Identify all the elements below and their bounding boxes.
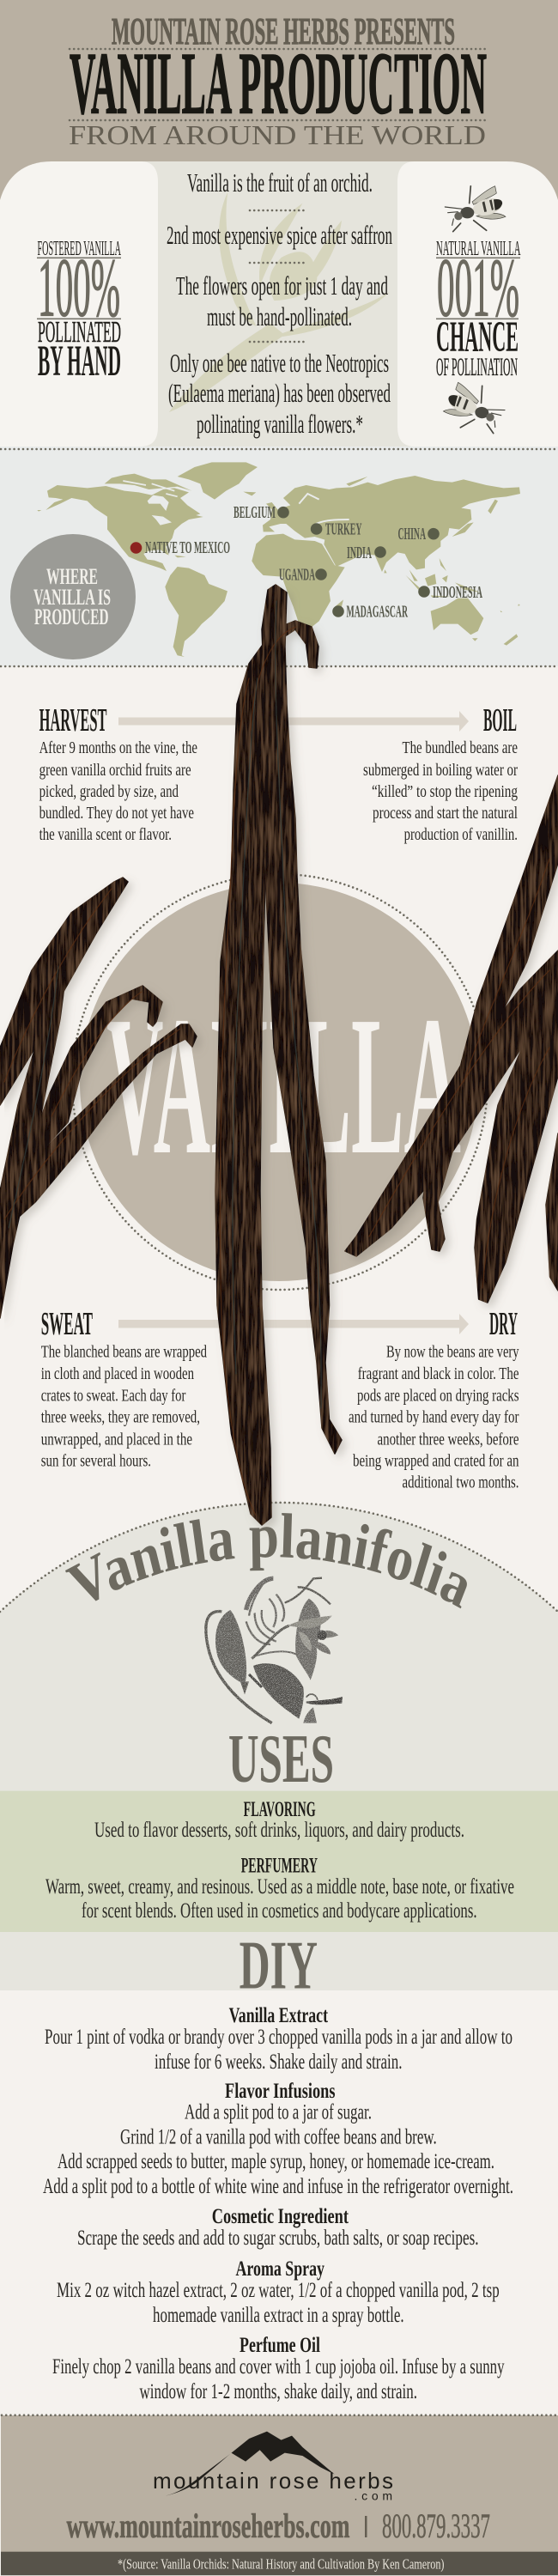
where vanilla is produced badge <box>10 534 136 659</box>
header banner <box>0 0 558 206</box>
text: sweat <box>41 1343 207 1470</box>
text: sweat: in cloth and placed in wooden <box>41 1364 194 1383</box>
text: harvest: After 9 months on the vine, the <box>39 738 197 757</box>
arrow: harvest to boil <box>118 711 469 732</box>
icon: top bee <box>445 186 506 232</box>
text: dry <box>349 1343 519 1492</box>
text: boil: production of vanillin. <box>404 825 518 844</box>
bean: left long diagonal <box>0 1024 197 1234</box>
marker: Uganda: UGANDA <box>279 566 315 585</box>
where vanilla is produced badge: VANILLA IS <box>33 585 111 610</box>
panel: diy recipes: infuse for 6 weeks. Shake daily and strain. <box>155 2050 402 2074</box>
panel: map: NATIVE TO MEXICO <box>145 538 230 557</box>
panel: fostered vanilla stat: 100% <box>38 242 120 335</box>
text: boil <box>363 738 518 844</box>
where vanilla is produced badge: PRODUCED <box>34 605 108 629</box>
panel: diy recipes: Cosmetic Ingredient <box>212 2205 349 2228</box>
title: subtitle: FROM AROUND THE WORLD <box>69 119 486 150</box>
heading: vanilla planifolia curved: Vanilla planifolia <box>65 1513 467 1609</box>
panel: diy recipes: Aroma Spray <box>235 2257 324 2281</box>
fact: bee: pollinating vanilla flowers.* <box>197 409 363 439</box>
text: sweat: sun for several hours. <box>41 1451 151 1470</box>
text: harvest <box>39 738 197 844</box>
marker: Indonesia: INDONESIA <box>433 583 482 602</box>
panel: fostered vanilla stat: FOSTERED VANILLA <box>38 238 121 260</box>
world map: Eurasia, Africa, Australia <box>252 476 520 646</box>
fact: orchid: Vanilla is the fruit of an orchid. <box>187 167 373 197</box>
marker: Uganda <box>279 566 327 585</box>
text: sweat: unwrapped, and placed in the <box>41 1430 192 1449</box>
vanilla beans <box>0 585 558 1525</box>
arrow: sweat to dry <box>118 1314 469 1334</box>
panel: diy recipes: Flavor Infusions <box>225 2080 336 2103</box>
panel: map: MADAGASCAR <box>347 603 408 622</box>
panel: natural vanilla stat <box>397 161 558 447</box>
bean: right diagonal <box>345 951 558 1256</box>
fact: bee <box>168 348 391 439</box>
text: harvest: green vanilla orchid fruits are <box>39 761 191 780</box>
text: sweat: three weeks, they are removed, <box>41 1408 200 1427</box>
bean: right lower <box>475 1024 558 1303</box>
panel: uses <box>0 1791 558 1932</box>
marker: Indonesia <box>418 583 482 602</box>
panel: diy recipes: Vanilla Extract <box>229 2004 328 2027</box>
bean: right tail <box>423 775 558 1251</box>
text: dry: additional two months. <box>402 1473 519 1492</box>
panel: diy recipes <box>43 2004 513 2403</box>
text: sweat: crates to sweat. Each day for <box>41 1387 186 1406</box>
marker: India: INDIA <box>347 544 372 562</box>
marker: Belgium <box>234 503 289 522</box>
panel: fostered vanilla stat: BY HAND <box>38 337 121 386</box>
marker: Madagascar <box>332 603 408 622</box>
panel: uses: PERFUMERY <box>241 1855 318 1878</box>
bean: left upper <box>0 878 128 1105</box>
text: DRY <box>489 1306 518 1342</box>
vanilla circle emblem <box>72 874 488 1290</box>
text: SWEAT <box>41 1306 93 1342</box>
text: harvest: the vanilla scent or flavor. <box>39 825 172 844</box>
marker: Belgium: BELGIUM <box>234 503 276 522</box>
panel: diy recipes: window for 1-2 months, shake daily, and strain. <box>139 2380 417 2403</box>
bean streak highlights <box>4 601 549 1516</box>
where vanilla is produced badge: WHERE <box>46 564 98 589</box>
heading: uses: USES <box>228 1722 334 1797</box>
marker: China: CHINA <box>398 525 426 544</box>
marker: Turkey <box>311 520 362 539</box>
panel: diy recipes: Add a split pod to a jar of sugar. <box>185 2101 372 2124</box>
panel: fostered vanilla stat <box>0 161 158 447</box>
text: HARVEST <box>39 702 106 738</box>
logo: mountain rose herbs: .com <box>354 2489 392 2503</box>
bean: right edge <box>546 1133 558 1291</box>
bean: left hook <box>32 986 162 1162</box>
bean: center left with hook <box>215 621 318 1525</box>
heading: diy: DIY <box>240 1929 318 2004</box>
source bar <box>1 2552 558 2575</box>
website: www.mountainroseherbs.com <box>67 2506 350 2545</box>
panel: map <box>0 447 558 666</box>
panel: vanilla planifolia dome <box>0 1501 558 2004</box>
fact: flowers: must be hand-pollinated. <box>207 301 352 331</box>
illustration: faded orchid <box>169 191 390 412</box>
bean: left curved stem <box>0 956 66 1318</box>
icon: bottom bee <box>441 381 507 434</box>
fact: flowers: The flowers open for just 1 day and <box>176 270 388 301</box>
panel: uses: FLAVORING <box>244 1798 316 1821</box>
world map: Americas and Greenland <box>37 462 258 657</box>
footer <box>1 2415 558 2575</box>
divider bar <box>365 2516 367 2537</box>
panel: intro facts <box>137 161 421 447</box>
text: harvest: bundled. They do not yet have <box>39 804 194 823</box>
text: harvest: picked, graded by size, and <box>39 782 179 801</box>
text: sweat: The blanched beans are wrapped <box>41 1343 207 1362</box>
fact: flowers <box>176 270 388 331</box>
panel: diy recipes: homemade vanilla extract in a spray bottle. <box>153 2304 404 2327</box>
logo: mountain rose herbs: mountain rose herbs <box>153 2468 393 2494</box>
bean: center right <box>262 585 342 1454</box>
marker: Mexico <box>130 538 230 557</box>
panel: diy recipes: Perfume Oil <box>240 2334 320 2357</box>
text: boil: The bundled beans are <box>402 738 518 757</box>
marker: Turkey: TURKEY <box>325 520 362 539</box>
logo: mountain rose herbs <box>153 2432 393 2503</box>
illustration: orchid engraving <box>206 1578 343 1723</box>
panel: fostered vanilla stat: POLLINATED <box>38 315 121 349</box>
text: boil: “killed” to stop the ripening <box>372 782 518 801</box>
